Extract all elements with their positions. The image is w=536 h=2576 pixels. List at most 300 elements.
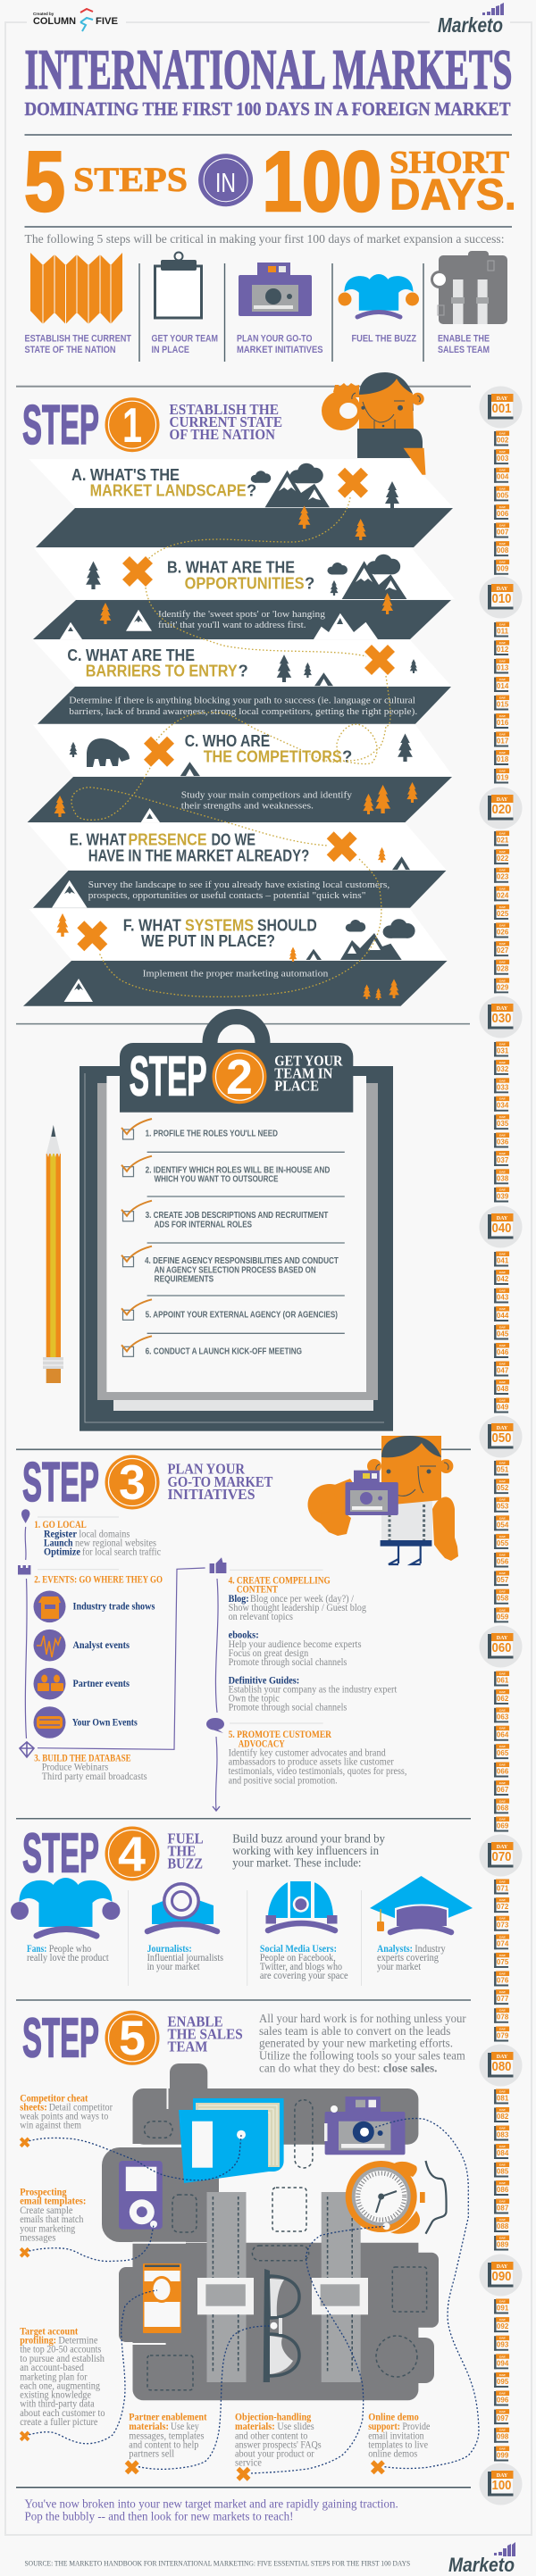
step 1 heading: CURRENT STATE: [170, 413, 282, 430]
days 021-029: DAY: [499, 832, 507, 836]
days 091-099: 093: [497, 2341, 509, 2349]
text: compelling content: ebooks:: [229, 1630, 259, 1640]
days 011-019: DAY: [499, 623, 507, 627]
text: build the database: Third party email broadcasts: [42, 1772, 147, 1782]
step 2 heading: 2: [226, 1049, 253, 1105]
text: go local: for local search traffic: [82, 1547, 161, 1558]
day 060 milestone: [479, 1625, 522, 1668]
overview labels: [25, 334, 490, 355]
icon: jester hat fans: [11, 1878, 120, 1936]
headline: 5 steps in 100 short days: 5: [24, 134, 65, 229]
day 100 milestone: DAY: [497, 2473, 508, 2479]
icon: alarm clock: [346, 2161, 447, 2234]
icon: camera: [239, 263, 312, 316]
day 080 milestone: 080: [491, 2059, 511, 2074]
days 051-059: DAY: [499, 1554, 507, 1557]
text: customer advocacy: testimonials, video testimonials, quotes for press,: [229, 1766, 407, 1777]
text: customer advocacy: ADVOCACY: [239, 1738, 285, 1749]
icon: clipboard: [155, 252, 202, 318]
days 011-019: DAY: [499, 659, 507, 663]
day 080 milestone: DAY: [497, 2055, 508, 2060]
checklist text: 2. IDENTIFY WHICH ROLES WILL BE IN-HOUSE AND: [146, 1165, 330, 1175]
day 040 milestone: DAY: [497, 1216, 508, 1221]
days 081-089: DAY: [499, 2089, 507, 2093]
text: online demo support: Provide: [402, 2422, 430, 2432]
days 021-029: 028: [497, 965, 509, 973]
days 051-059: DAY: [499, 1498, 507, 1502]
days 081-089: DAY: [499, 2181, 507, 2185]
days 051-059: 053: [497, 1503, 509, 1511]
step 3 heading: PLAN YOUR: [168, 1461, 246, 1478]
text: compelling content: Definitive Guides:: [229, 1675, 299, 1686]
text: compelling content: Blog:: [229, 1594, 249, 1605]
days 051-059: 059: [497, 1613, 509, 1621]
days 071-079: DAY: [499, 2027, 507, 2030]
icon: social media helmet: [266, 1880, 338, 1930]
text: compelling content: [229, 1575, 398, 1713]
step 1 heading: OF THE NATION: [170, 426, 275, 443]
days 061-069: [494, 1671, 509, 1832]
text: objection handling: answer prospects' FAQs: [235, 2439, 322, 2450]
text: prospecting email templates: messages: [20, 2233, 56, 2244]
days 011-019: DAY: [499, 696, 507, 700]
text: E body: [88, 880, 390, 901]
influencer text: People who: [49, 1944, 91, 1955]
source line: SOURCE: THE MARKETO HANDBOOK FOR INTERNATIONAL MARKETING: FIVE ESSENTIAL STEPS FOR THE FIRST 100 DAYS: [25, 2559, 410, 2567]
day 090 milestone: DAY: [497, 2264, 508, 2270]
step 3 heading: [22, 1452, 272, 1513]
text: B body: [158, 609, 326, 630]
text: step 4 intro: your market. These include:: [232, 1856, 361, 1870]
event labels: [72, 1602, 155, 1728]
question F: SHOULD: [257, 916, 317, 935]
days 091-099: DAY: [499, 2300, 507, 2304]
text: go local: new regional websites: [75, 1538, 156, 1549]
icon: clipboard: [80, 1016, 393, 1431]
days 041-049: DAY: [499, 1271, 507, 1274]
text: target account profiling: create a fuller picture: [20, 2417, 98, 2428]
step 3 heading: STEP: [22, 1452, 99, 1513]
days 091-099: 097: [497, 2414, 509, 2422]
days 011-019: 015: [497, 700, 509, 709]
icon: trade show: [34, 1591, 66, 1622]
text: partner enablement: messages, templates: [129, 2430, 205, 2441]
closing message: You've now broken into your new target market and are rapidly gaining traction.: [25, 2497, 398, 2510]
text: go local: Launch: [44, 1538, 73, 1549]
days 091-099: DAY: [499, 2410, 507, 2413]
illustration: sales mixer board: [102, 2063, 447, 2400]
logo: Marketo bottom: Marketo: [448, 2554, 515, 2576]
days 071-079: DAY: [499, 1935, 507, 1938]
closing message: [25, 2497, 398, 2522]
influencer text: [27, 1944, 446, 1981]
text: go local: [34, 1520, 161, 1558]
text: target account profiling: Target account: [20, 2326, 78, 2337]
X markers: [77, 468, 395, 951]
days 002-009: 006: [497, 510, 509, 518]
days 002-009: DAY: [499, 487, 507, 490]
days 041-049: 045: [497, 1330, 509, 1338]
text: build the database: Produce Webinars: [42, 1763, 109, 1773]
checklist text: [145, 1130, 339, 1357]
text: online demo support: templates to live: [368, 2439, 428, 2450]
days 041-049: DAY: [499, 1344, 507, 1347]
question texts: [67, 465, 418, 979]
text: partner enablement: materials:: [129, 2422, 169, 2432]
days 081-089: 087: [497, 2204, 509, 2213]
text: partner enablement: [129, 2413, 207, 2459]
day 070 milestone: [479, 1834, 522, 1877]
days 071-079: 075: [497, 1958, 509, 1966]
text: objection handling: service: [235, 2458, 262, 2469]
question E: E. WHAT: [70, 830, 127, 849]
overview labels: SALES TEAM: [438, 345, 490, 355]
days 081-089: 089: [497, 2241, 509, 2248]
headline: 5 steps in 100 short days: IN: [215, 167, 236, 198]
day 090 milestone: 090: [491, 2269, 511, 2284]
step 2 heading: STEP: [130, 1046, 207, 1108]
text: compelling content: Own the topic: [229, 1694, 280, 1705]
days 061-069: DAY: [499, 1745, 507, 1748]
question A: A. WHAT'S THE: [71, 465, 180, 484]
days 011-019: 014: [497, 682, 509, 690]
text: step 5 intro: [259, 2012, 466, 2074]
text: compelling content: CONTENT: [237, 1585, 278, 1596]
days 021-029: 027: [497, 946, 509, 955]
days 041-049: DAY: [499, 1289, 507, 1293]
days 051-059: 054: [497, 1521, 509, 1529]
panel: step 2 clipboard: [43, 1016, 393, 1431]
days 021-029: 023: [497, 873, 509, 881]
question A: [71, 465, 256, 500]
text: competitor cheat sheets: win against them: [20, 2121, 81, 2131]
days 051-059: 052: [497, 1484, 509, 1492]
intro sentence: The following 5 steps will be critical in making your first 100 days of market expansion a success:: [25, 232, 504, 246]
text: prospecting email templates: emails that match: [20, 2214, 84, 2225]
days 031-039: DAY: [499, 1079, 507, 1082]
step 1 heading: ESTABLISH THE: [170, 401, 279, 418]
panel: step 1: [22, 372, 455, 1006]
closing message: Pop the bubbly -- and then look for new markets to reach!: [25, 2509, 293, 2522]
days 011-019: 013: [497, 664, 509, 671]
text: compelling content: Help your audience become experts: [229, 1639, 362, 1650]
text: target account profiling: profiling:: [20, 2335, 56, 2346]
days 081-089: 084: [497, 2149, 509, 2157]
days 021-029: DAY: [499, 869, 507, 872]
text: partner enablement: Use key: [171, 2422, 199, 2432]
days 061-069: 064: [497, 1731, 509, 1739]
days 021-029: DAY: [499, 979, 507, 982]
headline: 5 steps in 100 short days: [24, 134, 516, 229]
timeline: 100 day calendar: [479, 386, 522, 2505]
checklist text: REQUIREMENTS: [155, 1274, 214, 1284]
days 081-089: DAY: [499, 2127, 507, 2130]
days 081-089: 083: [497, 2130, 509, 2139]
days 061-069: 061: [497, 1677, 509, 1684]
days 002-009: 008: [497, 546, 509, 554]
overview labels: IN PLACE: [152, 345, 189, 355]
days 031-039: 035: [497, 1120, 509, 1128]
text: objection handling: Use slides: [277, 2422, 314, 2432]
character: explorer with binoculars: [322, 372, 425, 475]
text: compelling content: Promote through social channels: [229, 1657, 348, 1668]
days 061-069: 068: [497, 1804, 509, 1812]
days 011-019: 018: [497, 755, 509, 763]
icon: speech bubble: [206, 1718, 224, 1733]
days 061-069: 065: [497, 1749, 509, 1757]
days 081-089: [494, 2089, 509, 2250]
days 051-059: 058: [497, 1595, 509, 1603]
days 081-089: DAY: [499, 2108, 507, 2112]
icon: pencil: [43, 1125, 63, 1383]
step 4 heading: 4: [118, 1826, 146, 1881]
text: D body: their strengths and weaknesses.: [181, 801, 314, 812]
text: compelling content: Establish your company as the industry expert: [229, 1685, 398, 1696]
days 031-039: DAY: [499, 1061, 507, 1064]
question C: BARRIERS TO ENTRY: [86, 661, 238, 679]
text: C body: barriers, lack of brand awareness, strong local competitors, getting the right people).: [69, 706, 418, 717]
text: customer advocacy: Identify key customer advocates and brand: [229, 1748, 386, 1759]
day 030 milestone: [479, 996, 522, 1038]
step 1 heading: STEP: [22, 395, 99, 456]
influencer text: in your market: [147, 1962, 200, 1972]
text: events: 2. EVENTS: GO WHERE THEY GO: [34, 1574, 163, 1585]
days 081-089: DAY: [499, 2218, 507, 2222]
day 020 milestone: 020: [491, 802, 511, 817]
text: prospecting email templates: Prospecting: [20, 2188, 67, 2198]
icon: thumbs up: [210, 1557, 226, 1573]
checklist text: 5. APPOINT YOUR EXTERNAL AGENCY (OR AGENCIES): [146, 1311, 338, 1321]
text: target account profiling: [20, 2326, 105, 2428]
influencer text: Analysts:: [377, 1944, 413, 1955]
days 041-049: 042: [497, 1275, 509, 1283]
day 020 milestone: DAY: [497, 797, 508, 803]
days 061-069: 067: [497, 1786, 509, 1794]
icon: graduation cap: [370, 1876, 473, 1932]
text: competitor cheat sheets: weak points and ways to: [20, 2112, 109, 2122]
step 2 heading: GET YOUR: [274, 1052, 343, 1069]
text: go local: 1. GO LOCAL: [34, 1520, 87, 1530]
days 031-039: DAY: [499, 1115, 507, 1119]
days 071-079: 076: [497, 1977, 509, 1984]
days 021-029: 024: [497, 891, 509, 899]
days 031-039: DAY: [499, 1188, 507, 1191]
days 021-029: DAY: [499, 905, 507, 909]
question D: C. WHO ARE: [185, 731, 270, 750]
icon: castle: [18, 1565, 30, 1575]
text: step 5 intro: All your hard work is for nothing unless your: [259, 2012, 466, 2025]
day 030 milestone: 030: [491, 1011, 511, 1026]
days 061-069: DAY: [499, 1671, 507, 1675]
overview labels: ESTABLISH THE CURRENT: [25, 334, 131, 345]
text: objection handling: materials:: [235, 2422, 275, 2432]
days 002-009: 002: [497, 436, 509, 445]
dashed route: [71, 497, 390, 996]
days 061-069: DAY: [499, 1799, 507, 1803]
days 031-039: 038: [497, 1174, 509, 1182]
icon: journalist: [147, 1882, 217, 1931]
text: step 4 intro: working with key influencers in: [232, 1844, 379, 1857]
days 002-009: 005: [497, 491, 509, 499]
days 061-069: DAY: [499, 1818, 507, 1822]
text: objection handling: [235, 2413, 322, 2469]
mountains, clouds and trees: [52, 463, 418, 1002]
days 071-079: DAY: [499, 1917, 507, 1921]
headline: 5 steps in 100 short days: STEPS: [73, 161, 188, 199]
icon: can: [143, 2263, 181, 2333]
days 091-099: 092: [497, 2322, 509, 2330]
logo: Column Five: COLUMN: [33, 16, 76, 27]
days 031-039: [494, 1041, 509, 1202]
icon: map: [30, 253, 122, 324]
question C: C. WHAT ARE THE: [67, 646, 195, 664]
text: online demo support: email invitation: [368, 2430, 424, 2441]
days 091-099: DAY: [499, 2318, 507, 2322]
text: prospecting email templates: your marketing: [20, 2223, 75, 2234]
question D: ?: [342, 746, 352, 765]
step 5 heading: THE SALES: [168, 2025, 243, 2042]
days 031-039: 039: [497, 1193, 509, 1200]
text: B body: fruit' that you'll want to address first.: [158, 620, 306, 630]
days 021-029: 029: [497, 983, 509, 991]
event labels: Analyst events: [73, 1640, 130, 1651]
influencer text: Influential journalists: [147, 1953, 223, 1963]
days 051-059: [494, 1461, 509, 1622]
overview labels: FUEL THE BUZZ: [352, 334, 416, 345]
text: online demo support: Online demo: [368, 2413, 419, 2423]
day 090 milestone: [479, 2254, 522, 2297]
days 021-029: 026: [497, 929, 509, 936]
checklist text: ADS FOR INTERNAL ROLES: [155, 1220, 252, 1230]
ribbons: [23, 459, 455, 1006]
logo: Column Five: Created by: [33, 12, 54, 16]
days 071-079: 078: [497, 2013, 509, 2022]
character: photographer: [307, 1436, 458, 1564]
text: E body: prospects, opportunities or useful contacts – potential "quick wins": [88, 890, 365, 901]
question E: PRESENCE: [129, 830, 207, 849]
day 070 milestone: DAY: [497, 1845, 508, 1850]
days 011-019: DAY: [499, 770, 507, 773]
text: online demo support: [368, 2413, 430, 2459]
days 091-099: [494, 2298, 509, 2461]
day 080 milestone: [479, 2045, 522, 2086]
days 011-019: DAY: [499, 678, 507, 681]
day 030 milestone: DAY: [497, 1006, 508, 1012]
influencer text: Fans:: [27, 1944, 46, 1955]
text: customer advocacy: 5. PROMOTE CUSTOMER: [229, 1730, 332, 1740]
influencer text: your market: [377, 1962, 422, 1972]
question E: [70, 830, 309, 864]
days 051-059: DAY: [499, 1608, 507, 1612]
overview labels: MARKET INITIATIVES: [237, 345, 323, 355]
days 041-049: 044: [497, 1312, 509, 1320]
five step overview icons: [25, 251, 507, 362]
dashed connectors: [29, 2119, 479, 2473]
text: compelling content: Promote through social channels: [229, 1703, 348, 1713]
days 071-079: 079: [497, 2032, 509, 2039]
days 021-029: 025: [497, 910, 509, 918]
days 031-039: 036: [497, 1138, 509, 1146]
check boxes: [121, 1119, 152, 1356]
days 081-089: 082: [497, 2113, 509, 2121]
overview labels: ENABLE THE: [438, 334, 490, 345]
days 002-009: 004: [497, 473, 509, 481]
text: step 5 intro: Utilize the following tools so your sales team: [259, 2048, 465, 2062]
days 011-019: 017: [497, 738, 509, 745]
text: competitor cheat sheets: Detail competitor: [49, 2102, 113, 2113]
days 031-039: DAY: [499, 1152, 507, 1155]
text: go local: Register: [44, 1529, 77, 1539]
overview labels: STATE OF THE NATION: [25, 345, 116, 355]
days 091-099: DAY: [499, 2337, 507, 2340]
days 091-099: 096: [497, 2397, 509, 2404]
step 1 heading: 1: [122, 397, 142, 453]
panel: step 4: [11, 1823, 473, 1986]
days 071-079: DAY: [499, 1898, 507, 1902]
question A: ?: [247, 481, 256, 500]
checklist text: 3. CREATE JOB DESCRIPTIONS AND RECRUITMENT: [146, 1211, 328, 1221]
days 061-069: DAY: [499, 1763, 507, 1766]
question C: [67, 646, 248, 679]
days 051-059: DAY: [499, 1461, 507, 1464]
icon: glasses: [264, 2269, 299, 2382]
days 071-079: 073: [497, 1922, 509, 1930]
days 081-089: DAY: [499, 2145, 507, 2148]
influencer text: People on Facebook,: [260, 1953, 336, 1963]
days 091-099: DAY: [499, 2373, 507, 2377]
day 040 milestone: [479, 1205, 522, 1248]
days 041-049: DAY: [499, 1380, 507, 1384]
days 091-099: 099: [497, 2452, 509, 2459]
days 002-009: DAY: [499, 505, 507, 509]
icon: analyst pulse: [34, 1630, 66, 1661]
icon: jester hat: [338, 274, 419, 317]
checklist text: 4. DEFINE AGENCY RESPONSIBILITIES AND CONDUCT: [145, 1256, 339, 1266]
icon: camera: [324, 2097, 406, 2155]
text: go local: local domains: [79, 1529, 130, 1539]
day 050 milestone: DAY: [497, 1426, 508, 1431]
days 051-059: 055: [497, 1539, 509, 1547]
question B: B. WHAT ARE THE: [167, 558, 295, 577]
text: D body: [181, 789, 353, 812]
days 081-089: DAY: [499, 2200, 507, 2204]
days 031-039: 037: [497, 1156, 509, 1164]
days 041-049: DAY: [499, 1307, 507, 1311]
icon: sales mixer: [431, 251, 507, 324]
step 5 heading: [22, 2007, 243, 2069]
mixer body: [102, 2063, 439, 2400]
icon: arrow down: [213, 1806, 220, 1811]
days 002-009: DAY: [499, 469, 507, 472]
days 011-019: 011: [497, 627, 509, 636]
days 071-079: 071: [497, 1884, 509, 1893]
day 010 milestone: DAY: [497, 587, 508, 592]
text: online demo support: support:: [368, 2422, 400, 2432]
checklist text: 1. PROFILE THE ROLES YOU'LL NEED: [146, 1130, 278, 1139]
days 091-099: DAY: [499, 2355, 507, 2358]
days 011-019: 016: [497, 719, 509, 727]
text: customer advocacy: and positive social promotion.: [229, 1775, 338, 1786]
text: partner enablement: partners sell: [129, 2448, 174, 2459]
text: step 4 intro: Build buzz around your brand by: [232, 1831, 385, 1845]
question E: HAVE IN THE MARKET ALREADY?: [88, 846, 309, 864]
question B: OPPORTUNITIES: [185, 573, 305, 592]
days 021-029: DAY: [499, 887, 507, 890]
days 091-099: DAY: [499, 2391, 507, 2395]
checklist text: 6. CONDUCT A LAUNCH KICK-OFF MEETING: [146, 1347, 302, 1357]
text: go local: Optimize: [44, 1547, 80, 1558]
question E: DO WE: [211, 830, 255, 849]
